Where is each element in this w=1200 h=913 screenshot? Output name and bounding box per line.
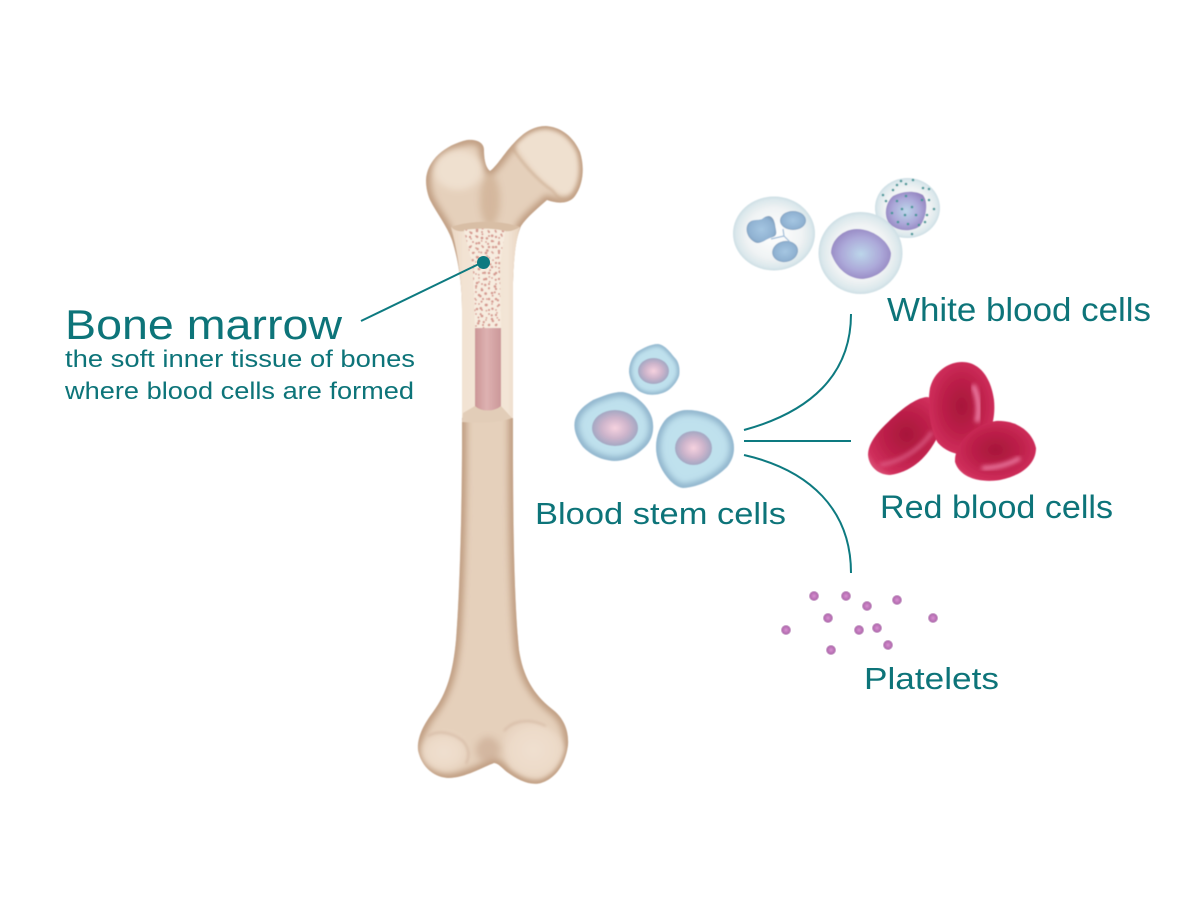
pointer line and dot: bone marrow [361, 256, 490, 321]
lymphocyte [818, 212, 902, 294]
icon: platelets [782, 592, 938, 654]
marrow speckles [464, 229, 505, 329]
stem cell left [574, 391, 654, 462]
branch arrows [744, 314, 851, 573]
granulocyte [875, 178, 940, 238]
lower cut ledge [462, 406, 512, 423]
branch to white cells [744, 314, 851, 430]
branch to platelets [744, 455, 851, 573]
marrow speckles second layer [464, 229, 505, 329]
stem cell top [628, 344, 680, 396]
description: bone marrow: the soft inner tissue of bones [65, 346, 415, 373]
marrow cavity cut surface [451, 222, 520, 418]
stem cell right [655, 409, 735, 488]
description: bone marrow [64, 346, 415, 405]
heading: bone marrow: Bone marrow [65, 301, 343, 348]
label: platelets: Platelets [864, 661, 999, 696]
icon: white blood cells [733, 178, 940, 294]
icon: red blood cells [868, 362, 1036, 481]
icon: blood stem cells [574, 344, 735, 488]
bone base and shading [410, 120, 590, 790]
red cell right [955, 421, 1036, 481]
label: white blood cells: White blood cells [887, 291, 1151, 328]
description: bone marrow: where blood cells are formed [64, 378, 414, 405]
infographic [65, 125, 1150, 784]
red cell left [868, 397, 945, 475]
label: red blood cells: Red blood cells [880, 489, 1113, 525]
label: blood stem cells: Blood stem cells [535, 496, 786, 531]
branch to red cells [744, 440, 851, 442]
red cell middle [929, 362, 994, 454]
illustration: femur bone [410, 120, 590, 790]
spongy bone marrow [464, 229, 505, 329]
red marrow column [475, 328, 501, 413]
neutrophil [733, 196, 815, 270]
upper cut rim [451, 222, 520, 231]
